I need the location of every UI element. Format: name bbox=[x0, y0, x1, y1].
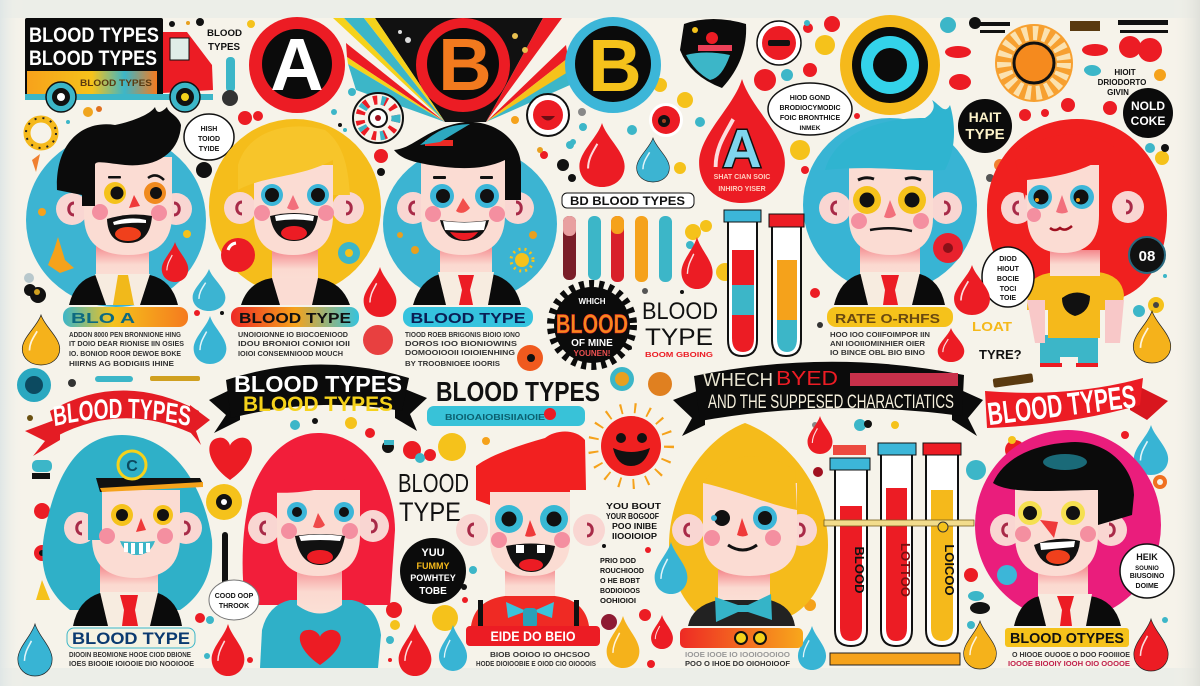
nose bbox=[1056, 195, 1068, 214]
character 4: boy teal hair bbox=[803, 100, 977, 305]
text blocks under row 1: DOMOOIOOII IOIOIENHING bbox=[405, 350, 516, 357]
apple bbox=[221, 238, 255, 272]
fringe bbox=[262, 445, 362, 500]
text blocks under row 1: BY TROOBNIOEE IOORIS bbox=[405, 361, 500, 368]
tube 1 bbox=[728, 220, 757, 356]
mouth with teal teeth bbox=[120, 541, 155, 555]
ribbon: black centre: BLOOD TYPES bbox=[234, 371, 402, 397]
blood drops scattered bbox=[17, 123, 1171, 676]
label pills row 1: BLOOD TYPE bbox=[239, 310, 351, 327]
mouth bbox=[440, 220, 489, 241]
backdrop circle bbox=[803, 118, 977, 292]
tshirt bbox=[260, 600, 381, 668]
starburst: which blood: YOUNEN! bbox=[574, 349, 610, 358]
pills row 2: BLOOD TYPE bbox=[72, 629, 190, 648]
icon: sunburst top right bbox=[995, 24, 1073, 102]
eyes bbox=[495, 505, 523, 533]
starburst: which blood bbox=[551, 284, 633, 366]
icon: big drop with letter A: INHIRO YISER bbox=[718, 186, 766, 193]
head bbox=[1027, 165, 1099, 253]
nose bbox=[737, 518, 748, 536]
text block char 8: BIOB OOIOO IO OHCSOO bbox=[490, 652, 591, 659]
stars bbox=[515, 253, 529, 267]
ribbon: black centre: BLOOD TYPES bbox=[243, 393, 393, 416]
icon: negative sign roundel bbox=[757, 21, 801, 65]
note: you about: OOHIOIOI bbox=[600, 598, 636, 605]
badge: B bbox=[416, 18, 510, 112]
shirt and legs bbox=[1040, 335, 1098, 357]
note: you about bbox=[600, 502, 661, 605]
text blocks under row 1: IDOU BRONIOI CONIOI IOII bbox=[238, 341, 350, 348]
text block 3: TIOOD ROEB BRIGONIS BIOIO IONO bbox=[405, 332, 521, 339]
teal bar bbox=[427, 406, 585, 426]
ears bbox=[224, 192, 256, 224]
ribbon: black right: WHECH bbox=[703, 370, 773, 390]
truck cab bbox=[163, 32, 213, 93]
badge: nold coke bbox=[1123, 88, 1173, 138]
truck illustration: BLOOD TYPES bbox=[29, 47, 157, 70]
speech bubble: right of char 5: DIOD bbox=[999, 256, 1017, 263]
note: top right text bbox=[1085, 66, 1146, 97]
ears bbox=[819, 192, 851, 224]
text blocks under row 1: DOROS IOO BIONIOWINS bbox=[405, 341, 517, 348]
cheeks bbox=[491, 532, 507, 548]
badge: A bbox=[249, 17, 345, 113]
mouth bbox=[1034, 539, 1080, 566]
ears bbox=[64, 512, 96, 544]
icon: sun badge top left bbox=[26, 118, 56, 148]
test tubes bottom: LOTTOO bbox=[898, 543, 913, 597]
badge: you funny: TOBE bbox=[419, 586, 447, 597]
left ear bbox=[1001, 192, 1033, 224]
head bbox=[84, 157, 172, 255]
ears bbox=[456, 514, 488, 546]
heading: blood type centre bbox=[642, 298, 718, 359]
backdrop circle bbox=[383, 146, 557, 302]
badge: B second: B bbox=[588, 24, 642, 107]
hair bbox=[57, 107, 181, 206]
speech bubble: right of char 5: HIOUT bbox=[997, 266, 1020, 273]
text blocks under row 1: ANI IOOIIOMINHIER OIER bbox=[830, 341, 925, 348]
nose bbox=[129, 195, 140, 208]
nose bbox=[136, 518, 146, 532]
speech bubble: right of char 5 bbox=[982, 247, 1034, 307]
eyes bbox=[1028, 185, 1052, 209]
nose bbox=[884, 200, 896, 218]
icon: dark blob picture bbox=[680, 19, 746, 88]
speech bubble: heik: HEIK bbox=[1136, 552, 1158, 562]
character 7: woman red hair bbox=[243, 433, 395, 668]
hair bbox=[993, 442, 1134, 525]
badge: hait type bbox=[958, 99, 1012, 153]
character 10: pink circle boy bbox=[975, 430, 1161, 626]
test tubes bottom bbox=[824, 443, 974, 665]
head bbox=[849, 167, 933, 255]
cheeks bbox=[704, 530, 720, 546]
head bbox=[92, 490, 180, 578]
small blood types note bbox=[207, 28, 243, 106]
note: you about: POO INIBE bbox=[612, 522, 658, 531]
speech bubble: top centre: FOIC BRONTHICE bbox=[780, 115, 840, 122]
speech bubble: heik: BIUSOINO bbox=[1130, 573, 1165, 580]
note: you about: YOUR BOGOOF bbox=[606, 512, 659, 521]
right ear bbox=[1112, 191, 1144, 223]
neck and suit bbox=[96, 245, 149, 281]
neck and suit bbox=[718, 570, 770, 602]
eyes bbox=[104, 182, 126, 204]
badge: B: B bbox=[438, 23, 492, 106]
speech bubble: blood type left bbox=[184, 114, 234, 178]
head bbox=[254, 165, 333, 255]
pill: orange gradient bbox=[680, 628, 803, 648]
truck text: BLOOD TYPES bbox=[29, 24, 159, 47]
sun smiley bbox=[593, 408, 669, 484]
test tubes bottom: LOICOO bbox=[942, 544, 957, 596]
tube 1 bbox=[833, 445, 866, 455]
hair bbox=[42, 435, 212, 610]
text block 4: HOO IOO COIIFOIMPOR IIN bbox=[830, 332, 930, 339]
head bbox=[421, 160, 505, 255]
heading: blood type middle bbox=[398, 468, 469, 527]
ribbon: red left: BLOOD TYPES bbox=[54, 398, 190, 426]
ribbon: black centre bbox=[209, 364, 427, 433]
speech bubble: cool blood: COOD OOP bbox=[215, 593, 254, 600]
hair backdrop bbox=[987, 119, 1167, 298]
text block char 9: IOOE IOOE IO IOOIOOOIOO bbox=[685, 652, 791, 659]
head bbox=[490, 490, 570, 576]
fringe bbox=[238, 126, 350, 195]
text block 2: UNOIOIONNE IO BIOCOENIOOD bbox=[238, 332, 348, 339]
badge: nold coke: COKE bbox=[1131, 114, 1165, 128]
eyes bbox=[111, 504, 133, 526]
text blocks under row 1: IT DOIO DEAR RIONISE IIN OSIES bbox=[69, 341, 184, 348]
mouth bbox=[728, 545, 757, 550]
speech bubble: right of char 5: TOIE bbox=[1000, 295, 1016, 302]
truck illustration bbox=[25, 18, 213, 112]
ears bbox=[397, 192, 429, 224]
character 6: hat with teal hair: C bbox=[126, 458, 138, 475]
truck illustration: BLOOD TYPES bbox=[80, 78, 152, 88]
heading: blood type middle: TYPE bbox=[399, 497, 461, 527]
neck bbox=[1050, 250, 1100, 276]
pill: blo a bbox=[63, 307, 188, 327]
badge: you funny bbox=[400, 538, 466, 604]
label pills row 1 bbox=[63, 307, 953, 327]
speech bubble: blood type left: TYIDE bbox=[199, 146, 220, 153]
ears bbox=[672, 514, 704, 546]
character 5: girl red hair bbox=[987, 119, 1167, 367]
pill: red do bbox=[466, 626, 600, 646]
small blood types note: TYPES bbox=[208, 42, 240, 53]
pill: yellow blood types bbox=[1005, 628, 1129, 647]
text blocks row 2: IOOOE BIOOIY IOOH OIO OOOOE bbox=[1008, 661, 1130, 668]
character 2: girl yellow hair bbox=[209, 119, 381, 305]
section: small blood types pill: BD BLOOD TYPES bbox=[570, 194, 685, 208]
tube 3 bbox=[926, 454, 958, 646]
eyes bbox=[261, 184, 283, 206]
eyes bbox=[1018, 501, 1042, 525]
character 9: yellow hair bbox=[669, 423, 828, 626]
text block 1: ADDON 8000 PEN BRONNIONE HING bbox=[69, 332, 181, 339]
speech bubble: heik: DOIME bbox=[1136, 583, 1159, 590]
hair bbox=[476, 432, 586, 505]
cheeks bbox=[851, 213, 867, 229]
pill: blood type 3 bbox=[403, 307, 533, 327]
eyes bbox=[430, 184, 454, 208]
heading: blood type centre: BLOOD bbox=[642, 298, 718, 325]
label pills row 1: BLOOD TYPE bbox=[410, 310, 526, 327]
hair bbox=[394, 122, 521, 200]
eyes bbox=[853, 186, 881, 214]
speech bubble: right of char 5: BOCIE bbox=[997, 276, 1019, 283]
character 3: boy black hair bbox=[383, 122, 557, 305]
nose bbox=[313, 513, 325, 528]
icon: mouth roundel bbox=[527, 94, 569, 136]
character 8: boy red hair bbox=[456, 432, 605, 628]
mouth bbox=[506, 544, 555, 572]
neck and suit bbox=[100, 565, 158, 601]
label: lotyre: LOAT bbox=[972, 319, 1012, 334]
base bar bbox=[830, 653, 960, 665]
eyes bbox=[287, 502, 307, 522]
character 5: girl red hair: 08 bbox=[1139, 248, 1155, 265]
nose bbox=[456, 198, 470, 213]
character 1: boy black hair bbox=[26, 107, 206, 307]
neck and shirt bbox=[505, 568, 555, 600]
pill: red do: EIDE DO BEIO bbox=[490, 628, 576, 644]
heading: blood type centre: BOOM GBOING bbox=[645, 352, 714, 359]
mouth bbox=[1050, 226, 1072, 230]
tube 2 bbox=[772, 226, 801, 356]
backdrop circle bbox=[26, 133, 206, 307]
fringe bbox=[1015, 134, 1135, 225]
neck and suit bbox=[272, 250, 318, 285]
cheeks bbox=[1015, 526, 1031, 542]
icon: red roundel bbox=[649, 103, 683, 137]
ribbon: red left bbox=[25, 390, 210, 456]
backdrop circle bbox=[975, 430, 1161, 620]
speech bubble: cool blood bbox=[209, 580, 259, 620]
neck and suit bbox=[1038, 565, 1088, 601]
ribbon: black right bbox=[673, 362, 983, 436]
head bbox=[1015, 486, 1098, 576]
mouth bbox=[295, 534, 345, 565]
truck cargo box bbox=[25, 18, 163, 97]
speech bubble: top centre: HIOD GOND bbox=[790, 95, 830, 102]
heading: blood types centre right bbox=[427, 376, 600, 426]
speech bubble: blood type left: TOIOD bbox=[198, 136, 220, 143]
fringe bbox=[703, 456, 797, 510]
label: lotyre: TYRE? bbox=[979, 347, 1022, 362]
pills row 2 bbox=[67, 628, 1129, 648]
heading: blood type middle: BLOOD bbox=[398, 468, 469, 498]
cheeks bbox=[281, 523, 297, 539]
hair backdrop bbox=[209, 119, 381, 295]
label pills row 1: BLO A bbox=[71, 310, 135, 327]
neck and suit bbox=[860, 245, 920, 281]
ears bbox=[56, 193, 88, 225]
badge: hait type: TYPE bbox=[965, 126, 1005, 143]
starburst: which blood: BLOOD bbox=[556, 309, 628, 339]
note: you about: O HE BOBT bbox=[600, 578, 641, 585]
decorations left of woman bbox=[206, 484, 242, 592]
character 6: hat with teal hair bbox=[42, 435, 212, 626]
shelf bbox=[824, 520, 974, 526]
mouth bbox=[270, 213, 318, 241]
speech bubble: top centre: INMEK bbox=[800, 125, 821, 132]
head bbox=[703, 483, 797, 576]
label pills row 1: RATE O-RHFS bbox=[835, 311, 940, 326]
speech bubble: top centre: BRODIOCYMODIC bbox=[779, 105, 841, 112]
ribbon: black right: BYED bbox=[776, 368, 838, 390]
teal drop beside char 9 bbox=[655, 542, 687, 594]
test tubes bottom: BLOOD bbox=[852, 547, 867, 593]
bow tie bbox=[506, 602, 554, 618]
nose bbox=[525, 520, 536, 537]
text blocks under row 1 bbox=[69, 332, 930, 368]
hair bbox=[825, 100, 954, 170]
starburst: which blood: OF MINE bbox=[571, 338, 613, 349]
heading: blood type centre: TYPE bbox=[645, 324, 713, 351]
badge: nold coke: NOLD bbox=[1131, 99, 1165, 113]
pill: yellow bbox=[827, 307, 953, 327]
t-shirt heart bbox=[300, 630, 341, 665]
badge: hait type: HAIT bbox=[969, 109, 1002, 125]
cheeks bbox=[1027, 208, 1041, 222]
heading: blood types centre right: BLOOD TYPES bbox=[436, 376, 600, 407]
pills row 2: BLOOD OTYPES bbox=[1010, 630, 1124, 647]
heading: blood types centre right: BIOIOAIOBISIIAIOIE bbox=[445, 413, 546, 422]
ribbon: black right: AND THE SUPPESED CHARACTIATICS bbox=[708, 392, 954, 413]
cheeks bbox=[425, 206, 441, 222]
icon: colour wheel bbox=[353, 93, 403, 143]
badge: you funny: FUMMY bbox=[416, 561, 450, 571]
truck wheels bbox=[46, 82, 76, 112]
neck bbox=[297, 565, 342, 614]
note: you about: PRIO DOD bbox=[600, 558, 636, 565]
text blocks row 2 bbox=[69, 652, 1130, 668]
badge: O bbox=[840, 15, 940, 115]
tube 2 bbox=[881, 454, 912, 646]
bow tie bbox=[715, 594, 772, 622]
speech bubble: heik bbox=[1120, 544, 1174, 598]
text blocks under row 1: HIIRNS AG BODIGIIS IHINE bbox=[69, 361, 174, 368]
hat bbox=[96, 478, 203, 492]
text blocks row 2: POO O IHOE DO OIOHOIOOF bbox=[685, 661, 791, 668]
speech bubble: top centre bbox=[768, 83, 852, 135]
text blocks under row 1: IO. BONIOD ROOR DEWOE BOKE bbox=[69, 351, 181, 358]
decorations bbox=[48, 237, 74, 273]
note: top right text: HIOIT bbox=[1114, 68, 1136, 77]
mouth bbox=[870, 228, 912, 231]
icon: big drop with letter A bbox=[699, 79, 785, 203]
eyes bbox=[714, 510, 730, 526]
note: you about: BODIOIOOS bbox=[600, 588, 640, 595]
speech bubble: cool blood: THROOK bbox=[219, 603, 249, 610]
note: top right text: DRIODORTO bbox=[1098, 78, 1146, 87]
teal blob bbox=[997, 565, 1017, 585]
badge 08 bbox=[1129, 237, 1165, 273]
teal star bbox=[338, 242, 360, 264]
nose bbox=[287, 195, 299, 210]
icon: big drop with letter A: SHAT CIAN SOIC bbox=[714, 174, 770, 181]
test tubes top bbox=[724, 210, 804, 356]
ribbon: red right: BLOOD TYPES bbox=[986, 379, 1138, 432]
neck and suit bbox=[440, 245, 492, 281]
badge: you funny: YUU bbox=[421, 547, 445, 559]
cheeks bbox=[254, 205, 270, 221]
hair bbox=[243, 433, 395, 605]
hair bbox=[669, 423, 828, 616]
note: top right text: GIVIN bbox=[1107, 88, 1129, 97]
badge: B second bbox=[565, 17, 661, 113]
cheeks bbox=[99, 528, 115, 544]
badge: A: A bbox=[270, 23, 324, 106]
speech bubble: right of char 5: TOCI bbox=[1000, 286, 1016, 293]
text block char 6: DIOOIN BEOMIONE HOOE CIOD DBIONE bbox=[69, 652, 191, 659]
label: lotyre bbox=[972, 319, 1022, 362]
note: you about: IIOOIOIOP bbox=[612, 532, 658, 541]
text blocks under row 1: IO BINCE OBL BIO BINO bbox=[830, 350, 926, 357]
speech bubble: blood type left: HISH bbox=[201, 126, 217, 133]
cheeks bbox=[92, 204, 108, 220]
icon: heart bbox=[209, 438, 252, 480]
mouth bbox=[107, 215, 152, 243]
note: you about: ROUCHIOOD bbox=[600, 568, 644, 575]
text blocks row 2: IOES BIOOIE IOIOOIE DIO NOOIOOE bbox=[69, 661, 194, 668]
badge: you funny: POWHTEY bbox=[410, 573, 456, 583]
nose bbox=[1040, 520, 1058, 538]
text blocks row 2: HODE DIOIOOBIE E OIOD CIO OIOOOIS bbox=[476, 661, 596, 668]
pill: blood type 2 bbox=[231, 307, 359, 327]
text blocks under row 1: IOIOI CONSEMNIOOD MOUCH bbox=[238, 351, 343, 358]
small test tubes bbox=[563, 216, 672, 282]
pin bbox=[933, 233, 963, 263]
note: you about: YOU BOUT bbox=[606, 502, 661, 511]
ears bbox=[990, 514, 1022, 546]
pill: blood type white bbox=[67, 628, 195, 648]
rainbow rays between letters bbox=[333, 18, 570, 122]
starburst: which blood: WHICH bbox=[578, 297, 606, 306]
text block char 10: O HIOOE OUOOE O DOO FOOIIIOE bbox=[1012, 652, 1130, 659]
speech bubble: heik: SOUNIO bbox=[1135, 566, 1159, 572]
head bbox=[277, 490, 360, 576]
ears bbox=[248, 512, 280, 544]
icon: big drop with letter A: A bbox=[722, 119, 762, 179]
small blood types note: BLOOD bbox=[207, 28, 243, 38]
